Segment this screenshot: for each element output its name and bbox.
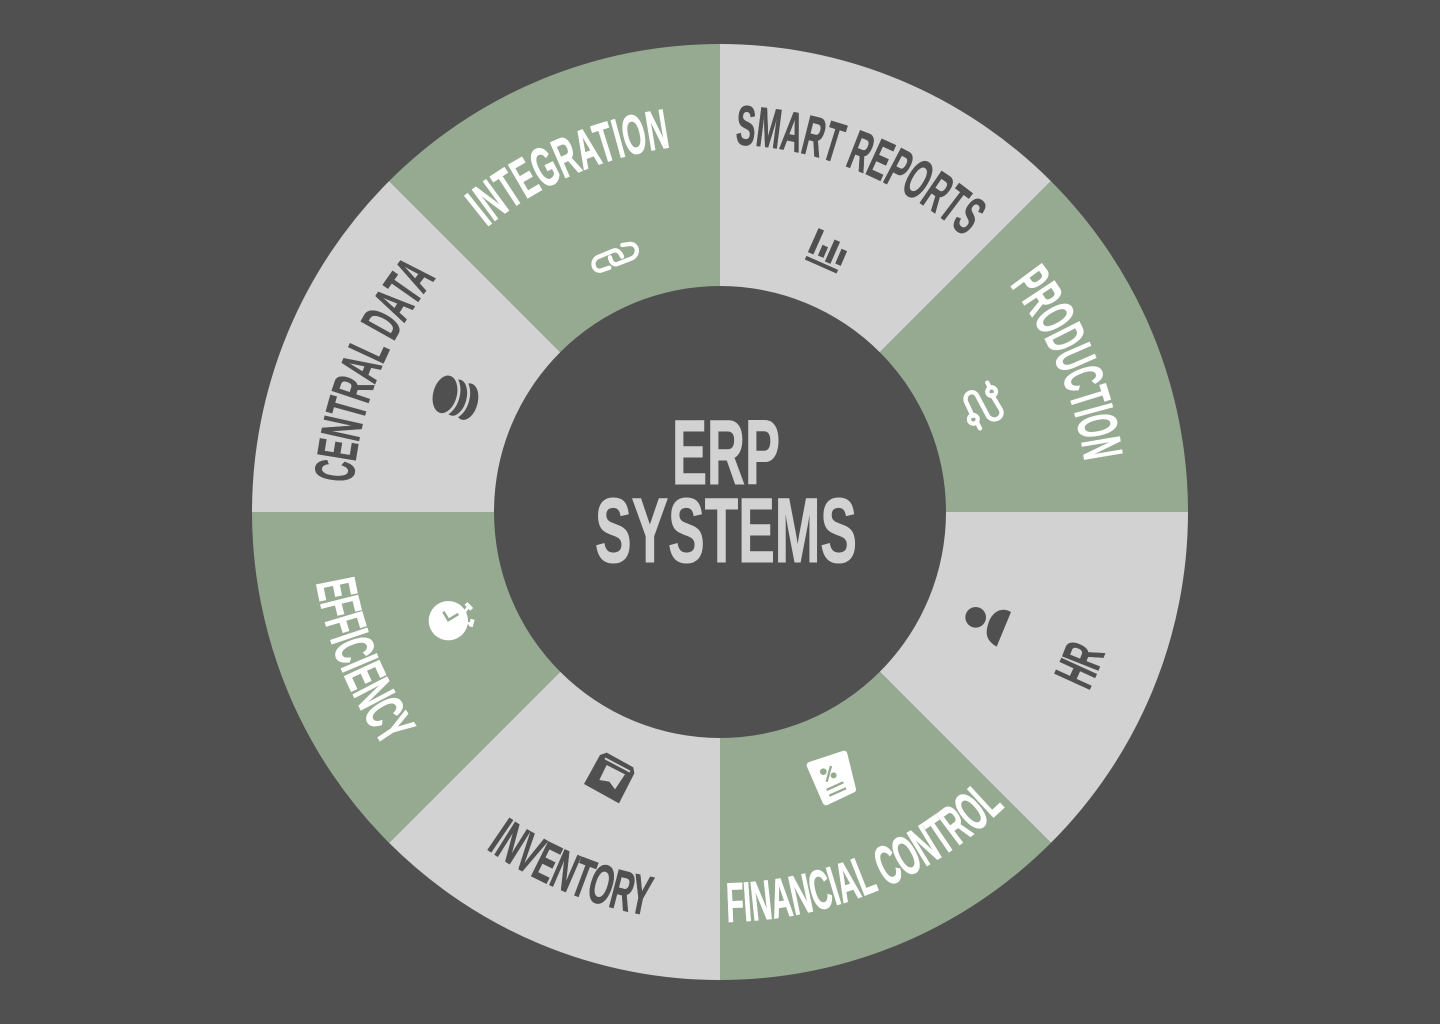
label: production: PRODUCTION [1010,263,1123,460]
icon: percent document [810,754,853,802]
segment: efficiency [252,512,560,843]
label: efficiency: EFFICIENCY [316,576,417,742]
label: inventory: INVENTORY [487,818,655,914]
segment: smart reports [720,44,1051,352]
segment: integration [389,44,720,352]
title: ERP Systems: ERP [672,402,780,504]
label: smart reports: SMART REPORTS [736,106,986,234]
icon: production flow [966,383,1002,428]
icon: stopwatch [429,601,473,640]
segment: hr [880,512,1188,843]
label: financial control: FINANCIAL CONTROL [727,786,1005,922]
label: integration: INTEGRATION [464,109,669,226]
icon: chain link [594,244,637,271]
icon: person [965,607,1011,647]
title: ERP Systems [595,402,857,582]
segment: production [880,181,1188,512]
label: central data: CENTRAL DATA [315,260,436,480]
segment: central data [252,181,560,512]
icon: bar chart [806,229,844,272]
segment: inventory [389,672,720,980]
icon: database [427,371,482,423]
segment: financial control [720,672,1051,980]
title: ERP Systems: SYSTEMS [595,480,857,582]
label: hr: HR [1054,642,1106,690]
icon: bookmark book [584,753,634,803]
